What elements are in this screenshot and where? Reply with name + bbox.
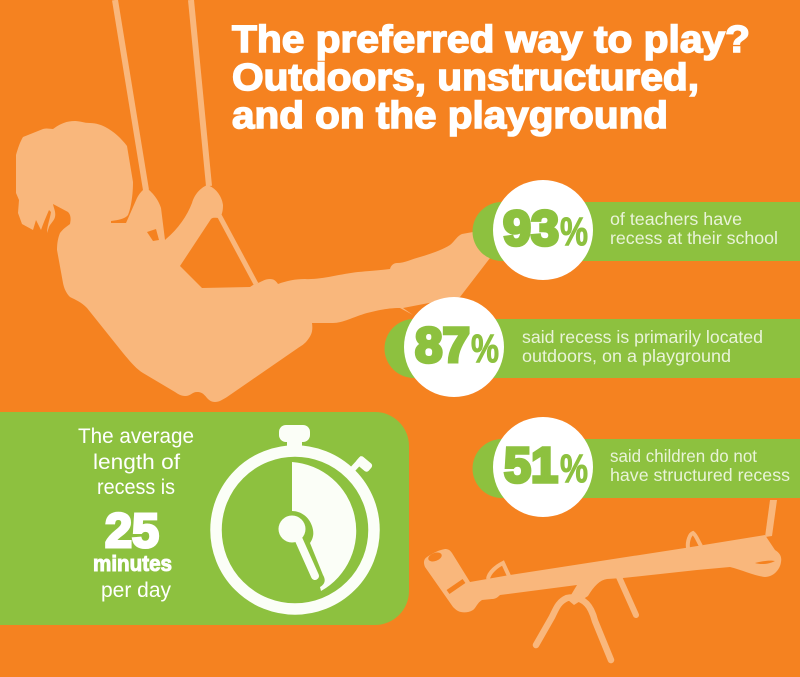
stat: 93 percent: recess at their school <box>610 228 778 248</box>
text: average length: 25 <box>105 505 159 558</box>
title: and on the playground <box>232 95 668 137</box>
text: average length: per day <box>101 578 171 602</box>
panel: average recess length <box>0 412 409 625</box>
stat: 51 percent: % <box>560 447 588 491</box>
stat: 93 percent: of teachers have <box>610 209 742 229</box>
title: The preferred way to play? <box>232 19 750 61</box>
stat: 51 percent: said children do not <box>610 446 757 466</box>
icon: seesaw <box>424 500 781 660</box>
text: average length: recess is <box>97 475 175 499</box>
stat: 51 percent: 51 <box>504 439 558 493</box>
stat: 87 percent: 87 <box>415 319 470 373</box>
stat: 87 percent: outdoors, on a playground <box>522 346 731 366</box>
stat: 51 percent <box>473 417 800 517</box>
stat: 87 percent <box>384 297 800 397</box>
title <box>232 19 750 137</box>
stat: 93 percent: 93 <box>503 202 559 256</box>
text: average length: length of <box>93 450 180 474</box>
stat: 51 percent: have structured recess <box>610 465 790 485</box>
text: average length <box>78 424 194 602</box>
stat: 93 percent <box>472 180 800 280</box>
stat: 87 percent: said recess is primarily located <box>522 327 763 347</box>
text: average length: The average <box>78 424 194 448</box>
title: Outdoors, unstructured, <box>232 57 699 99</box>
icon: girl on swing silhouette <box>16 0 490 402</box>
text: average length: minutes <box>93 551 172 576</box>
stat: 93 percent: % <box>560 210 588 254</box>
icon: stopwatch <box>216 425 374 609</box>
stat: 87 percent: % <box>471 327 499 371</box>
